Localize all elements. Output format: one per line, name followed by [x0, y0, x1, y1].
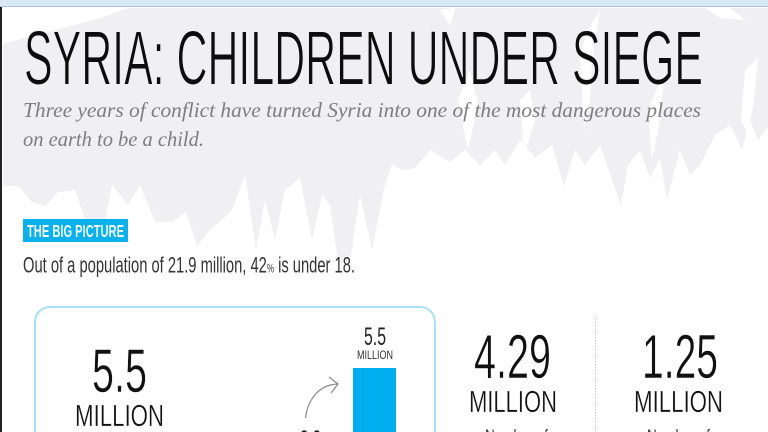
stat: 4.29 million: [469, 323, 557, 432]
stat: 4.29 million: MILLION: [469, 384, 557, 419]
section tag: the big picture: THE BIG PICTURE: [27, 221, 124, 241]
subtitle: [23, 98, 701, 151]
stat: 1.25 million: 1.25: [642, 323, 718, 392]
section tag: the big picture: [23, 219, 128, 242]
subtitle: Three years of conflict have turned Syria into one of the most dangerous places: [23, 98, 701, 122]
stat: 1.25 million: [634, 323, 723, 432]
stat: 5.5 million: [75, 337, 164, 432]
stat: 4.29 million: 4.29: [474, 323, 551, 392]
left edge bar: [0, 7, 2, 432]
dotted divider: [594, 316, 596, 432]
background: torn grey brush texture: [3, 8, 768, 262]
stat: 5.5 million: 5.5: [92, 337, 147, 405]
bar label: [357, 323, 393, 362]
bar label: MILLION: [357, 348, 393, 362]
browser top band: [0, 0, 768, 7]
arrow: [306, 377, 338, 418]
stat: 1.25 million: MILLION: [634, 384, 723, 419]
bar label: 5.5: [364, 323, 386, 351]
subtitle: on earth to be a child.: [23, 127, 204, 151]
stat: 5.5 million: MILLION: [75, 398, 164, 432]
bar: [353, 368, 396, 432]
panel: 5.5 million: [35, 307, 435, 432]
population statement: Out of a population of 21.9 million, 42% is under 18.: [23, 252, 355, 278]
